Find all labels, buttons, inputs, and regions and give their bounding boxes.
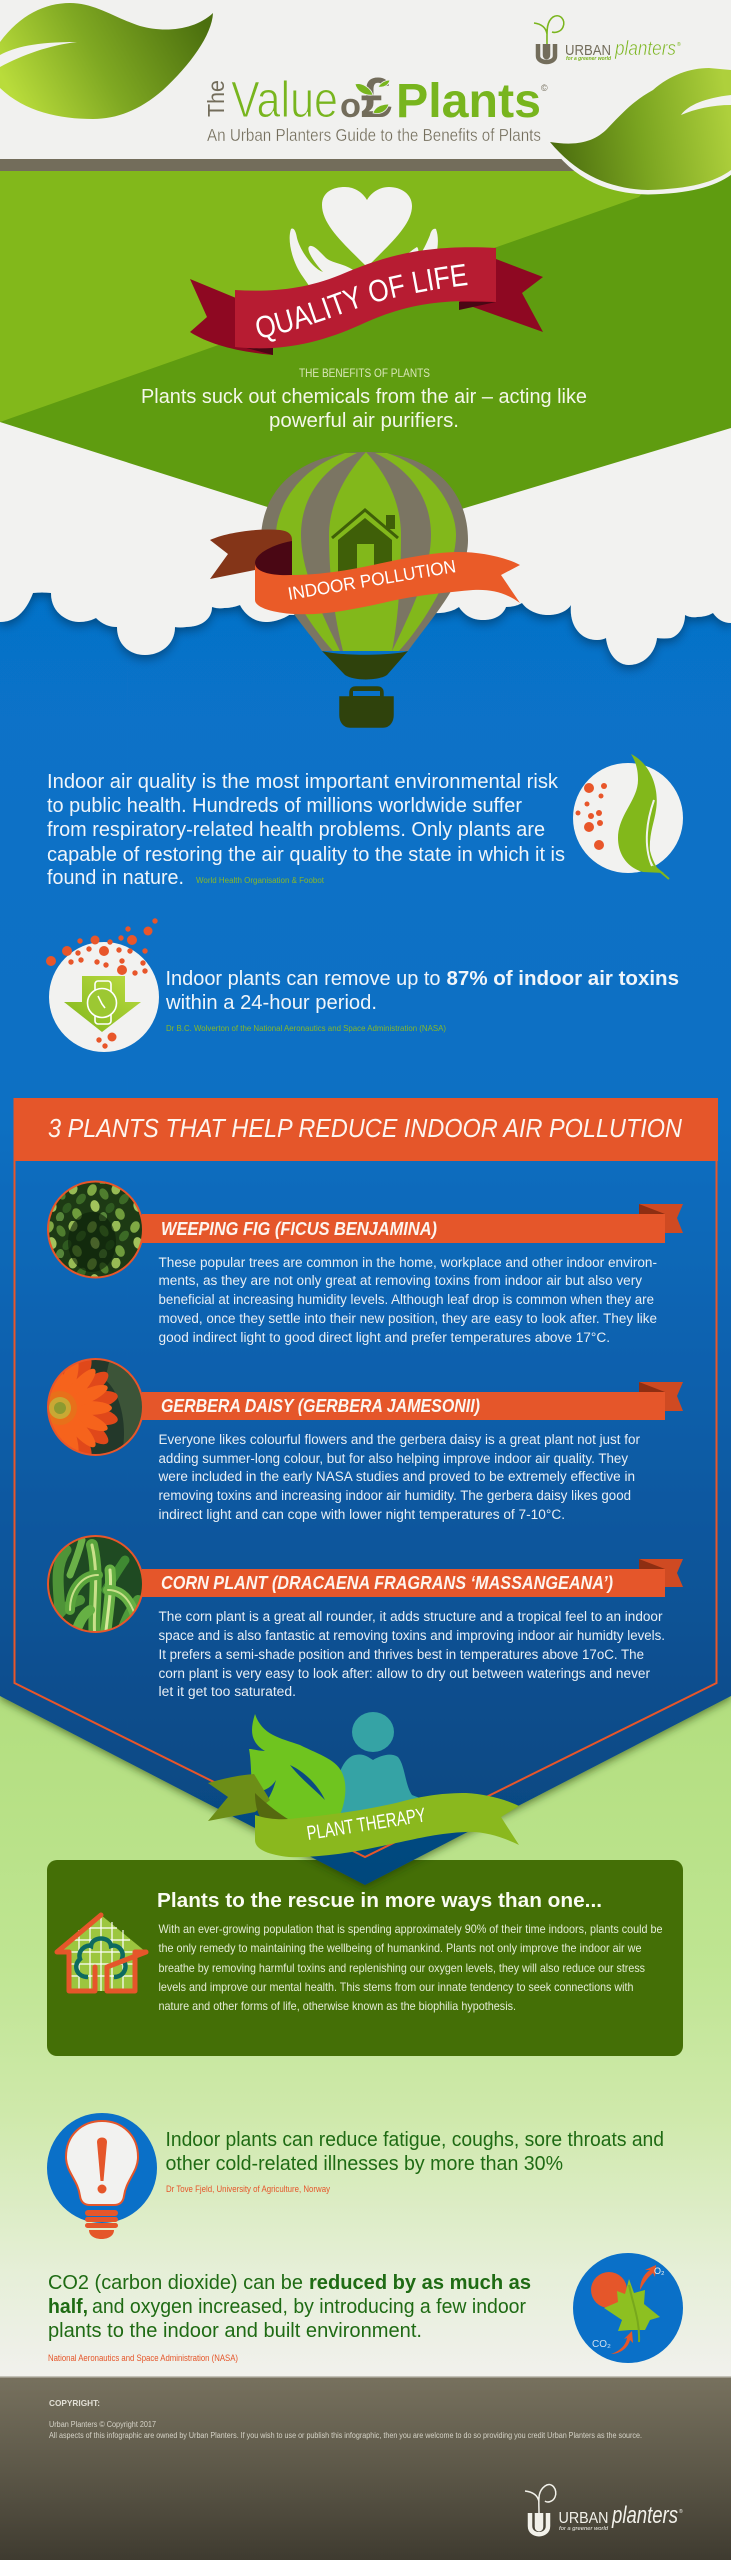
title: © <box>541 83 548 93</box>
text block: 87% of indoor air toxins: Indoor plants can remove up to <box>166 968 440 990</box>
citation: world health organisation: World Health Organisation & Foobot <box>196 876 325 885</box>
title: The <box>203 80 229 117</box>
text block: co2: half, <box>48 2296 88 2318</box>
text block: indoor air quality <box>47 771 565 889</box>
logo: urban planters top: planters <box>614 38 676 60</box>
text: gerbera daisy description <box>157 1432 640 1522</box>
ribbon: quality of life <box>190 247 543 355</box>
footer text: All aspects of this infographic are owned by Urban Planters. If you wish to use or publish this infographic, then you are welcome to do so providing you credit Urban Planters as the source. <box>49 2431 642 2440</box>
plant: gerbera daisy <box>47 1358 683 1522</box>
footer heading: copyright: COPYRIGHT: <box>49 2398 100 2408</box>
text block: plants suck out chemicals: Plants suck out chemicals from the air – acting like <box>141 385 587 408</box>
text: corn plant description: let it get too saturated. <box>158 1684 296 1699</box>
sky panel: blue pentagon <box>0 590 731 1885</box>
text: gerbera daisy description: were included in the early NASA studies and proved to be extremely effective in <box>157 1469 635 1484</box>
text: corn plant description: It prefers a semi-shade position and thrives best in temperatures above 17oC. The <box>158 1647 644 1662</box>
text: gerbera daisy description: removing toxins and increasing indoor air humidity. The gerbera daisy likes good <box>158 1488 631 1503</box>
text block: co2: reduced by as much as <box>309 2272 531 2294</box>
text block: fatigue and coughs: other cold-related illnesses by more than 30% <box>166 2153 563 2175</box>
grey header band <box>0 159 731 171</box>
text block: fatigue and coughs <box>166 2129 664 2175</box>
heading: the benefits of plants: THE BENEFITS OF PLANTS <box>299 366 430 380</box>
text: weeping fig description: These popular trees are common in the home, workplace and other indoor environ- <box>158 1255 657 1270</box>
logo: urban planters top: URBAN <box>565 42 611 59</box>
logo: urban planters footer: planters <box>611 2502 678 2529</box>
text block: plants to the rescue <box>158 1922 663 2013</box>
logo: urban planters footer: for a greener world <box>559 2526 609 2532</box>
ribbon: gerbera daisy: GERBERA DAISY (GERBERA JAMESONII) <box>161 1396 480 1416</box>
text block: co2: plants to the indoor and built environment. <box>48 2320 422 2342</box>
title <box>203 66 548 130</box>
heading: plants to the rescue: Plants to the rescue in more ways than one... <box>157 1890 602 1912</box>
citation: nasa: National Aeronautics and Space Administration (NASA) <box>48 2353 238 2363</box>
ribbon: plant therapy <box>208 1774 519 1857</box>
panel heading: 3 plants <box>14 1098 718 1161</box>
green banner: quality of life background <box>0 171 731 538</box>
text: corn plant description <box>158 1609 665 1699</box>
icon: top left leaf <box>0 3 213 119</box>
plant: corn plant <box>46 1534 683 1699</box>
logo: urban planters footer: URBAN <box>558 2510 608 2527</box>
text block: plants to the rescue: the only remedy to maintaining the wellbeing of humankind. Plants not only improve the indoor air we <box>158 1941 642 1955</box>
background: light green lower section <box>0 1680 731 2377</box>
subtitle: An Urban Planters Guide to the Benefits of Plants <box>207 125 541 145</box>
text: gerbera daisy description: Everyone likes colourful flowers and the gerbera daisy is a great plant not just for <box>158 1432 640 1447</box>
text block: 87% of indoor air toxins: within a 24-hour period. <box>165 992 377 1014</box>
ribbon: quality of life: QUALITY OF LIFE <box>256 264 468 342</box>
icon: house with tree <box>57 1915 146 1991</box>
icon: heart and hands <box>290 187 438 290</box>
footer text: Urban Planters © Copyright 2017 <box>49 2420 156 2429</box>
logo: urban planters footer: ® <box>679 2508 683 2515</box>
panel: plants to the rescue box <box>47 1860 683 2056</box>
text block: plants suck out chemicals: powerful air purifiers. <box>269 409 459 432</box>
text block: plants to the rescue: levels and improve our mental health. This stems from our innate tendency to seek connections with <box>158 1980 634 1994</box>
text: corn plant description: corn plant is very easy to look after: allow to dry out between waterings and never <box>158 1666 651 1681</box>
text block: indoor air quality: Indoor air quality is the most important environmental risk <box>47 771 559 793</box>
footer text <box>49 2420 642 2440</box>
icon: co2 leaf: CO₂ <box>592 2339 611 2350</box>
text: corn plant description: space and is also fantastic at removing toxins and improving indoor air humidty levels. <box>158 1628 665 1643</box>
citation: wolverton: Dr B.C. Wolverton of the National Aeronautics and Space Administration (NASA) <box>166 1023 446 1033</box>
logo: urban planters footer <box>525 2485 683 2534</box>
text: weeping fig description: good indirect light to good direct light and prefer temperatures above 17°C. <box>158 1330 610 1345</box>
icon: house on balloon <box>332 510 398 574</box>
photo: gerbera daisy <box>47 1358 142 1456</box>
photo: weeping fig <box>46 1180 146 1280</box>
text block: plants to the rescue: nature and other forms of life, otherwise known as the biophilia hypothesis. <box>158 1999 516 2013</box>
text block: fatigue and coughs: Indoor plants can reduce fatigue, coughs, sore throats and <box>166 2129 664 2151</box>
title: £ <box>361 66 392 130</box>
ribbon: corn plant <box>142 1559 683 1597</box>
text: weeping fig description <box>158 1255 657 1345</box>
logo: urban planters top: for a greener world <box>566 56 612 62</box>
icon: co2 leaf: O₂ <box>654 2266 665 2276</box>
text: corn plant description: The corn plant is a great all rounder, it adds structure and a tropical feel to an indoor <box>158 1609 663 1624</box>
panel heading: 3 plants: 3 PLANTS THAT HELP REDUCE INDOOR AIR POLLUTION <box>48 1113 682 1143</box>
title: Value <box>231 71 338 128</box>
plant: weeping fig <box>46 1180 683 1345</box>
text block: co2: and oxygen increased, by introducing a few indoor <box>92 2296 526 2318</box>
icon: co2 leaf <box>573 2253 683 2363</box>
text block: 87% of indoor air toxins: 87% of indoor air toxins <box>446 968 679 990</box>
citation: tove fjeld: Dr Tove Fjeld, University of Agriculture, Norway <box>166 2184 330 2194</box>
clouds <box>0 400 731 665</box>
ribbon: plant therapy: PLANT THERAPY <box>305 1804 427 1845</box>
text: weeping fig description: ments, as they are not only great at removing toxins from indoor air but also very <box>158 1273 642 1288</box>
text: gerbera daisy description: adding summer-long colour, but for also helping improve indoor air quality. They <box>158 1451 628 1466</box>
footer panel <box>0 2376 731 2560</box>
text block: plants to the rescue: With an ever-growing population that is spending approximately 90% of their time indoors, plants could be <box>158 1922 663 1936</box>
text block: plants to the rescue: breathe by removing harmful toxins and replenishing our oxygen levels, they will also reduce our stress <box>158 1961 645 1975</box>
logo: urban planters top <box>534 16 681 62</box>
icon: arrow and watch with dots <box>46 918 159 1052</box>
text block: indoor air quality: found in nature. <box>47 867 184 889</box>
text: gerbera daisy description: indirect light and can cope with lower night temperatures of 7-10°C. <box>158 1507 565 1522</box>
text block: indoor air quality: capable of restoring the air quality to the state in which it is <box>47 844 565 866</box>
icon: person <box>332 1712 430 1825</box>
title: Plants <box>396 75 541 128</box>
ribbon: indoor pollution: INDOOR POLLUTION <box>286 556 457 604</box>
text block: 87% of indoor air toxins <box>165 968 679 1014</box>
text block: co2 <box>48 2272 531 2342</box>
text block: plants suck out chemicals <box>141 385 587 432</box>
ribbon: indoor pollution <box>210 530 520 614</box>
ribbon: weeping fig: WEEPING FIG (FICUS BENJAMINA) <box>161 1219 437 1239</box>
text block: co2: CO2 (carbon dioxide) can be <box>48 2272 303 2294</box>
text block: indoor air quality: to public health. Hundreds of millions worldwide suffer <box>47 795 522 817</box>
text: weeping fig description: moved, once they settle into their new position, they are easy to look after. They like <box>158 1311 657 1326</box>
text block: indoor air quality: from respiratory-related health problems. Only plants are <box>47 819 545 841</box>
title: o <box>340 87 361 125</box>
icon: leaf in circle <box>573 754 683 879</box>
ribbon: weeping fig <box>142 1204 683 1243</box>
background: paper <box>0 0 731 700</box>
icon: large leaf <box>249 1714 345 1820</box>
icon: light bulb <box>47 2113 157 2239</box>
panel: 3 plants outline <box>14 1161 716 1857</box>
logo: urban planters top: ® <box>677 41 681 48</box>
icon: top right leaf <box>550 68 731 193</box>
ribbon: corn plant: CORN PLANT (DRACAENA FRAGRANS ‘MASSANGEANA’) <box>161 1573 613 1593</box>
icon: hot air balloon <box>261 452 468 727</box>
photo: corn plant <box>47 1535 142 1633</box>
ribbon: gerbera daisy <box>142 1382 683 1420</box>
text: weeping fig description: beneficial at increasing humidity levels. Although leaf drop is common when they are <box>158 1292 654 1307</box>
